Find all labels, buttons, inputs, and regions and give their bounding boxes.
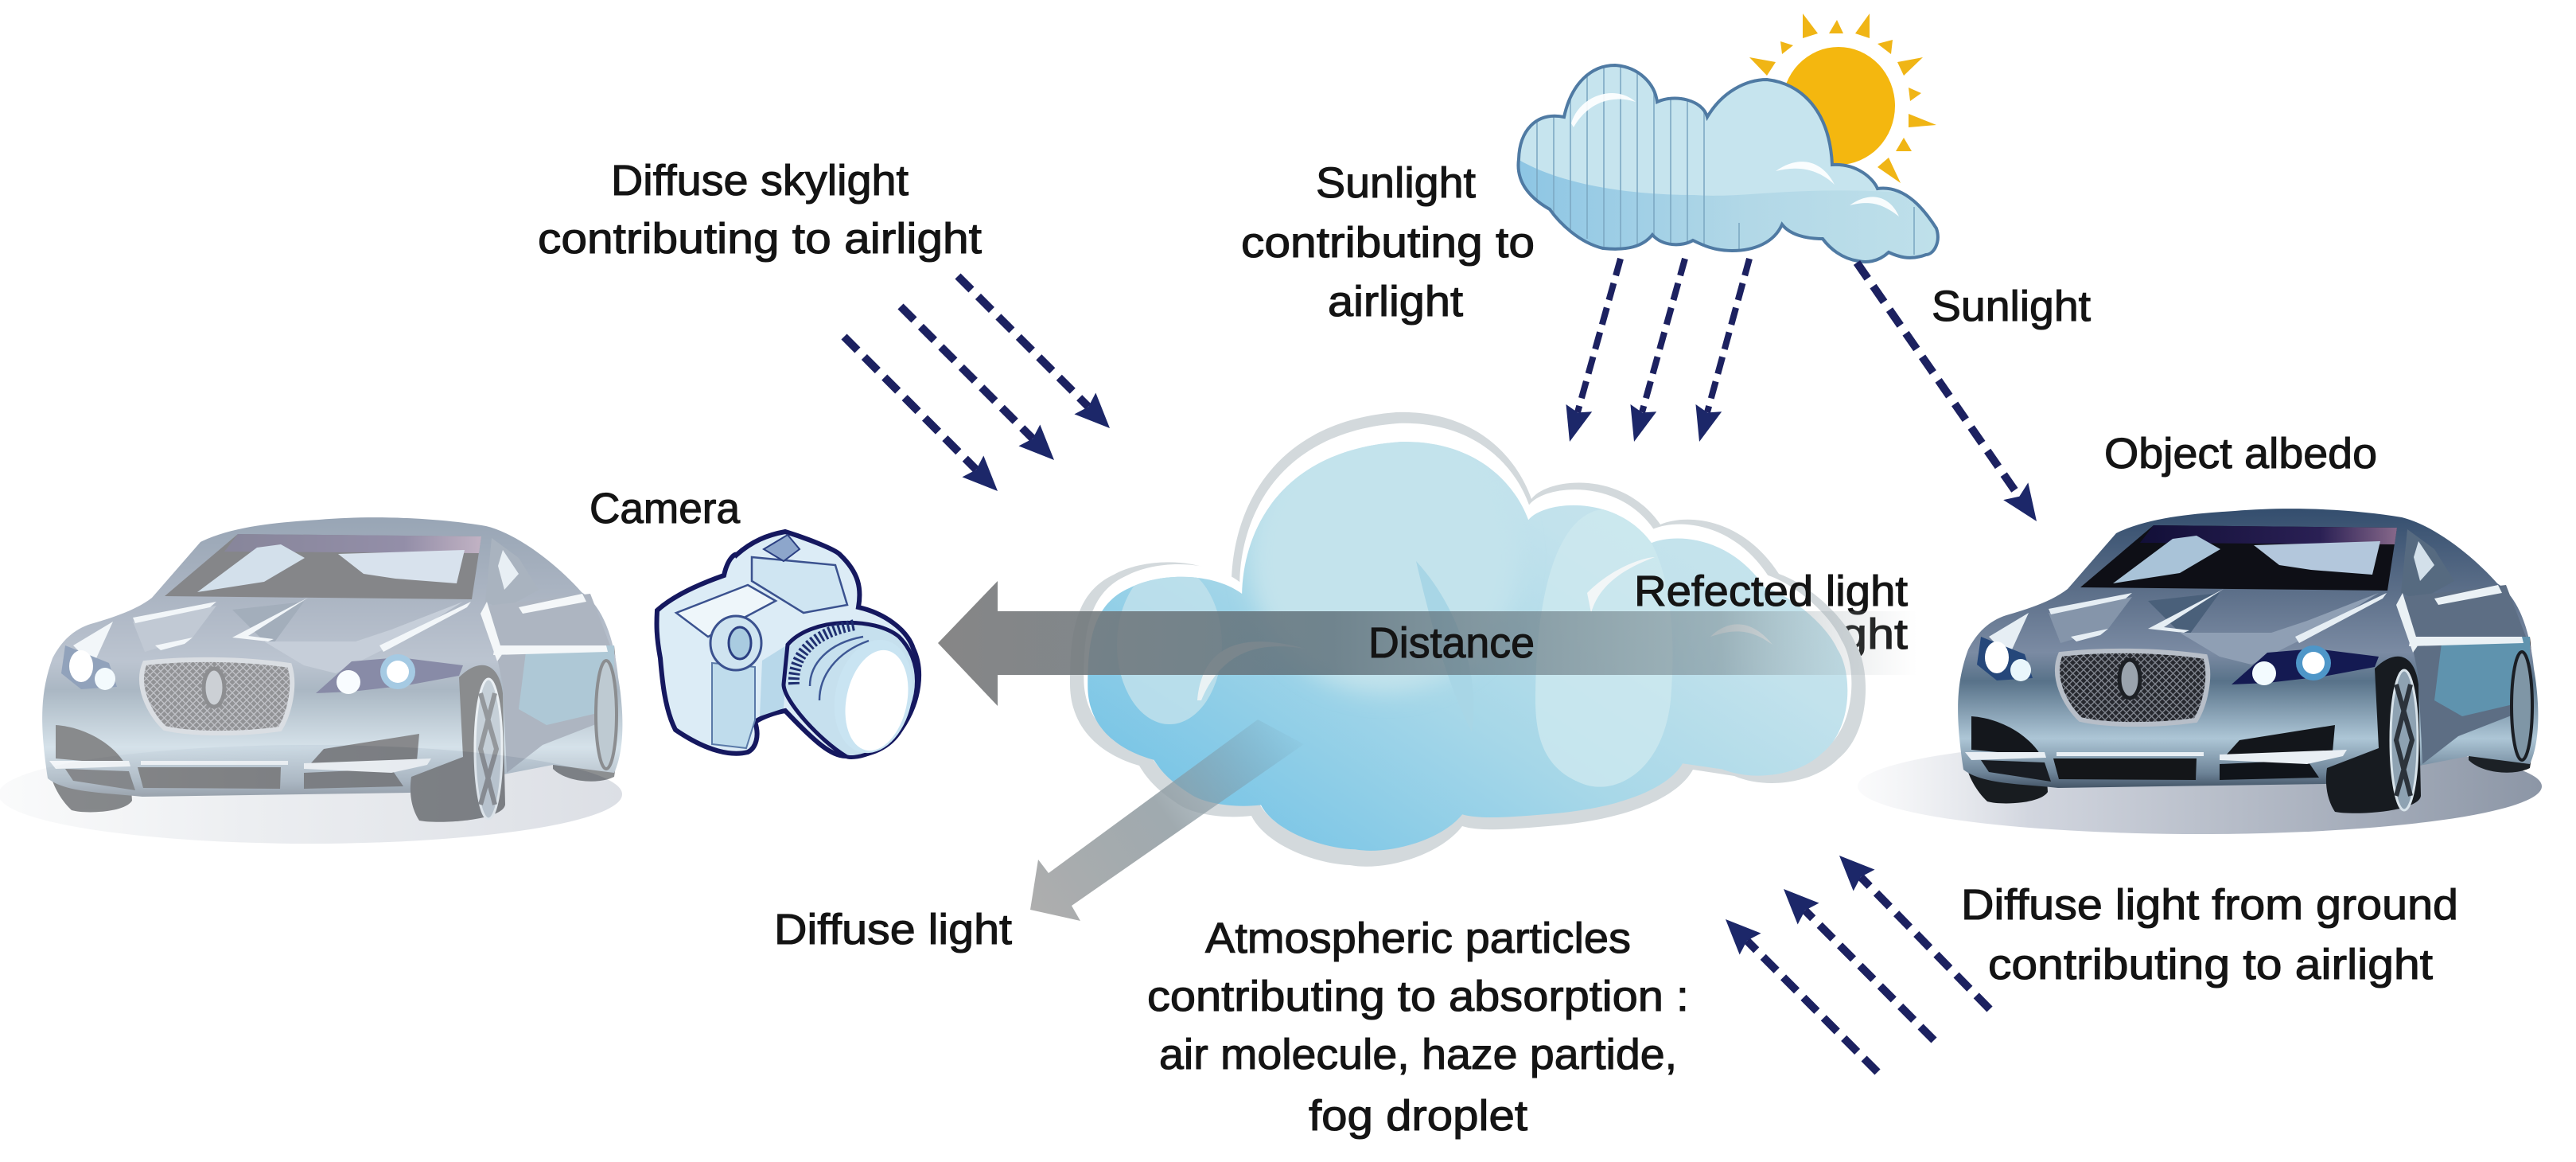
label: Atmospheric particles: Atmospheric particles (1205, 914, 1631, 962)
lens barrel (784, 622, 916, 757)
label: Diffuse light from ground (1961, 881, 2458, 988)
left air intake (1971, 716, 2041, 756)
label: Distance: Distance (1368, 619, 1535, 667)
left car shadow (0, 745, 622, 844)
front right wheel (2326, 657, 2421, 813)
label: Atmospheric particles: fog droplet (1309, 1092, 1527, 1140)
left car, hazy (42, 517, 622, 822)
right car, clear (1958, 509, 2538, 813)
camera grip (712, 663, 755, 748)
windscreen (2080, 525, 2397, 591)
label: Object albedo: Object albedo (2104, 430, 2377, 478)
left lobe highlight (1121, 576, 1218, 724)
left headlight (1977, 637, 2033, 681)
right headlight (2232, 645, 2379, 685)
label: Camera: Camera (590, 485, 741, 532)
badge (2119, 660, 2140, 698)
label: Diffuse skylight: Diffuse skylight (611, 157, 909, 205)
rear wheel rim (2512, 652, 2532, 760)
cloud blue fill (1088, 442, 1847, 851)
white swooshes (1587, 557, 1772, 645)
left glass reflection (2113, 536, 2220, 583)
sun icon (1749, 14, 1936, 183)
small rain cloud (1512, 64, 1941, 271)
central shadow swoosh (1416, 562, 1465, 681)
cloud white gap (1084, 423, 1851, 850)
camera icon (656, 532, 923, 760)
label: Diffuse light from ground: Diffuse light from ground (1961, 881, 2458, 929)
distance arrow (938, 581, 1917, 706)
cloud outline (1518, 65, 1938, 262)
big haze cloud (1070, 412, 1866, 867)
cloud lower shade (1520, 67, 1925, 260)
arrow: sunlight to object (1857, 263, 2049, 530)
label: Sunlight contributing to airlight (1241, 159, 1535, 326)
right car shadow (1858, 739, 2542, 834)
arrows: diffuse light from ground (1715, 845, 1990, 1072)
grille (2057, 651, 2208, 724)
body (1958, 509, 2538, 788)
label: Diffuse skylight (538, 157, 982, 263)
cloud inner shading (1117, 422, 1772, 787)
roof reflection band (2140, 525, 2397, 544)
side panel (2403, 585, 2530, 764)
label: Refected light: Refected light (1634, 567, 1908, 615)
label: Sunlight contributing to airlight: airlight (1328, 278, 1463, 326)
label: Atmospheric particles: contributing to absorption : (1147, 973, 1689, 1020)
central lobe highlight (1249, 422, 1520, 692)
diffuse light arrow (1030, 719, 1304, 921)
lower grille (2053, 758, 2197, 780)
label: Sunlight: Sunlight (1932, 283, 2091, 330)
label: Sunlight contributing to airlight: contributing to (1241, 219, 1535, 267)
camera dial (710, 616, 761, 670)
front-left tyre (1965, 760, 2048, 803)
right glass reflection (2254, 541, 2380, 575)
label: Sunlight contributing to airlight: Sunlight (1316, 159, 1476, 207)
arrows: diffuse skylight (844, 276, 1120, 501)
camera prism and top plate (752, 557, 847, 613)
rear wheel (2469, 637, 2538, 773)
arrows: sunlight contributing to airlight (1557, 259, 1749, 446)
label: Atmospheric particles: air molecule, haze partide, (1159, 1031, 1677, 1078)
label: Atmospheric particles (1147, 914, 1689, 1140)
label: Diffuse light: Diffuse light (774, 906, 1012, 953)
label: Diffuse light from ground: contributing to airlight (1988, 941, 2433, 988)
lens mount shade (760, 645, 788, 716)
lens glass (824, 633, 923, 760)
label: Diffuse skylight: contributing to airlight (538, 215, 982, 263)
right lobe highlight (1535, 509, 1672, 787)
hood highlights (2049, 597, 2132, 643)
right air intake (2225, 725, 2335, 756)
label: light, second line: light (1819, 610, 1908, 658)
cloud outer rim (1070, 412, 1866, 867)
side window (2401, 529, 2454, 601)
